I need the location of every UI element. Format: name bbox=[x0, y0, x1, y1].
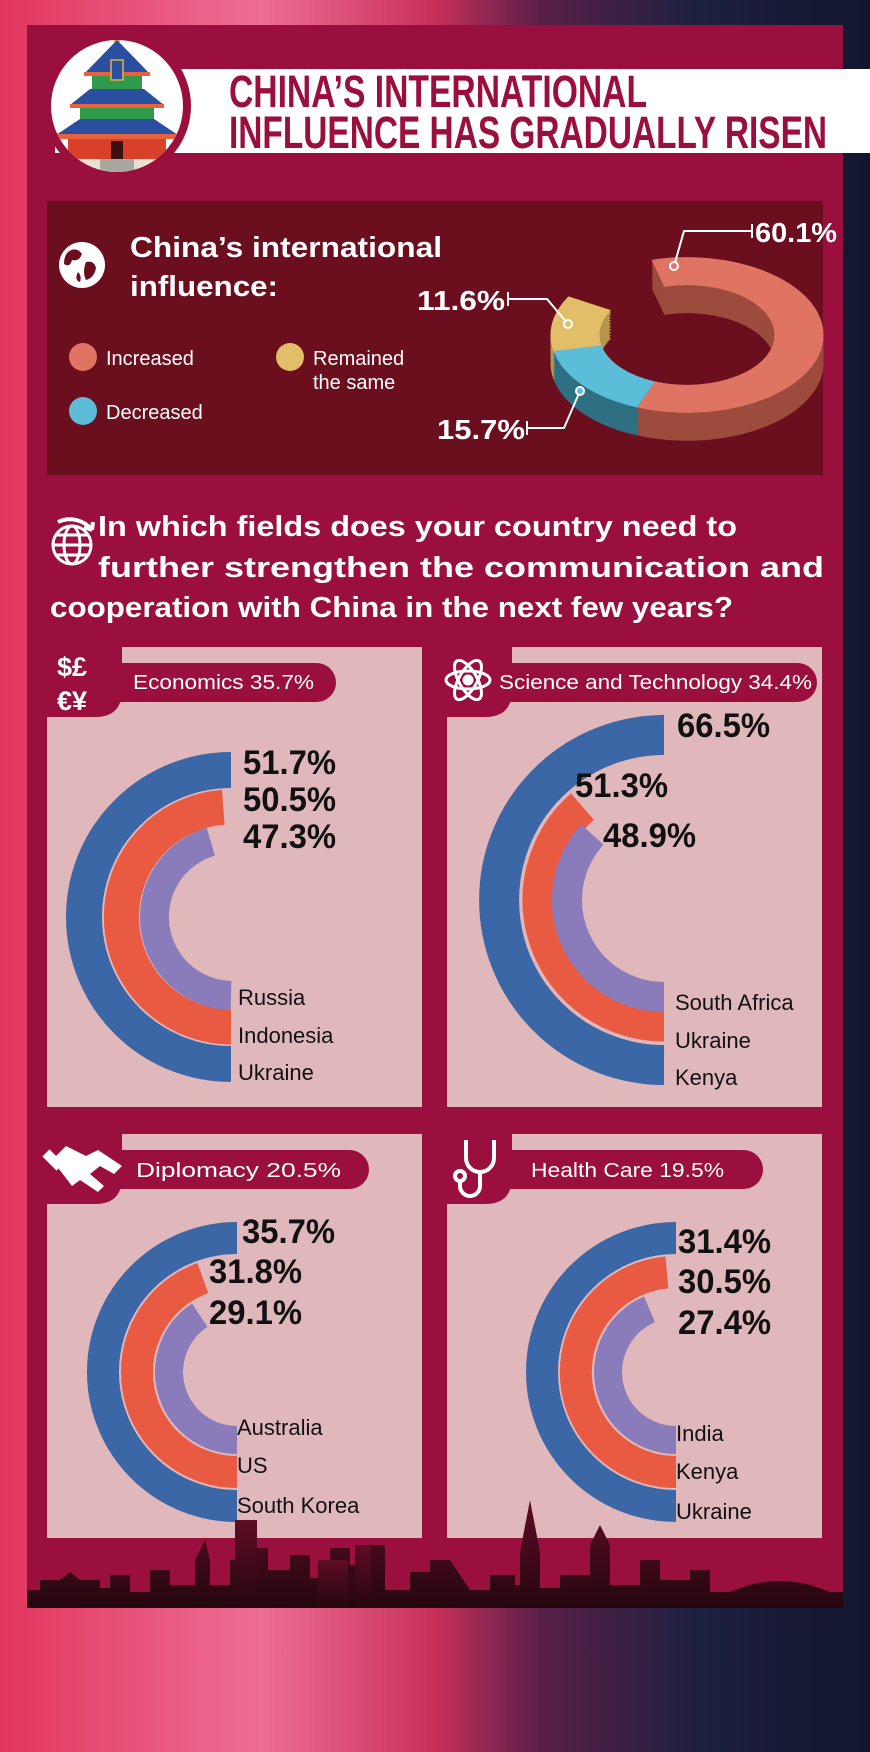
panel: economics: Economics 35.7% bbox=[133, 672, 314, 694]
icon: handshake bbox=[42, 1146, 122, 1192]
icon: stethoscope bbox=[455, 1140, 494, 1196]
panel: diplomacy: Australia bbox=[237, 1415, 323, 1440]
icon: currency bbox=[57, 652, 87, 716]
donut chart bbox=[417, 217, 837, 445]
icon: temple of heaven bbox=[51, 40, 191, 172]
panel: science and technology: Kenya bbox=[675, 1065, 738, 1090]
arc chart: health bbox=[542, 1238, 676, 1506]
legend: Increased bbox=[106, 348, 194, 370]
panel: science and technology: South Africa bbox=[675, 990, 794, 1015]
panel: health care: Ukraine bbox=[676, 1499, 752, 1524]
panel: health care: 27.4% bbox=[678, 1304, 771, 1342]
icon: globe bbox=[59, 242, 105, 288]
heading: influence: China’s international bbox=[130, 232, 442, 264]
panel: science and technology: 51.3% bbox=[575, 767, 668, 805]
donut chart: 60.1% bbox=[755, 217, 837, 248]
question heading: In which fields does your country need to bbox=[98, 511, 737, 543]
panel: health care: 30.5% bbox=[678, 1263, 771, 1301]
panel: health care: Health Care 19.5% bbox=[531, 1160, 724, 1182]
arc chart: economics bbox=[84, 770, 231, 1064]
panel: science and technology bbox=[446, 647, 822, 1107]
title bbox=[229, 66, 827, 158]
panel: health care bbox=[447, 1134, 822, 1538]
panel: economics: 50.5% bbox=[243, 781, 336, 819]
panel: science and technology: Ukraine bbox=[675, 1028, 751, 1053]
donut chart: 11.6% bbox=[417, 285, 505, 316]
icon: currency: $£ bbox=[57, 652, 87, 682]
title: CHINA’S INTERNATIONAL bbox=[229, 66, 647, 117]
title band bbox=[55, 66, 870, 158]
donut chart: 15.7% bbox=[437, 414, 525, 445]
heading: influence bbox=[130, 232, 442, 303]
icon: currency: €¥ bbox=[57, 686, 87, 716]
panel: economics: 51.7% bbox=[243, 744, 336, 782]
legend bbox=[69, 343, 404, 425]
arc chart: diplomacy bbox=[103, 1238, 237, 1506]
legend: the same bbox=[313, 372, 395, 394]
skyline silhouette bbox=[27, 1500, 843, 1608]
panel: diplomacy: US bbox=[237, 1453, 268, 1478]
legend: Remained bbox=[313, 348, 404, 370]
arc chart: science bbox=[499, 735, 664, 1065]
panel: diplomacy: 29.1% bbox=[209, 1294, 302, 1332]
panel: diplomacy: 35.7% bbox=[242, 1213, 335, 1251]
question heading: cooperation with China in the next few years? bbox=[50, 592, 733, 624]
panel: science and technology: 48.9% bbox=[603, 817, 696, 855]
panel: health care: India bbox=[676, 1421, 724, 1446]
panel: diplomacy bbox=[42, 1134, 422, 1538]
panel: science and technology: 66.5% bbox=[677, 707, 770, 745]
legend: Decreased bbox=[106, 402, 203, 424]
icon: globe with arrow bbox=[53, 519, 93, 564]
panel: health care: Kenya bbox=[676, 1459, 739, 1484]
panel: diplomacy: South Korea bbox=[237, 1493, 360, 1518]
panel: science and technology: Science and Technology 34.4% bbox=[499, 672, 812, 694]
panel: economics: 47.3% bbox=[243, 818, 336, 856]
question heading bbox=[50, 511, 824, 624]
panel: international influence bbox=[47, 201, 837, 475]
panel: diplomacy: Diplomacy 20.5% bbox=[136, 1160, 341, 1182]
question heading: further strengthen the communication and bbox=[98, 552, 824, 584]
panel: economics: Russia bbox=[238, 985, 306, 1010]
heading: influence: influence: bbox=[130, 271, 278, 303]
panel: diplomacy: 31.8% bbox=[209, 1253, 302, 1291]
panel: economics: Ukraine bbox=[238, 1060, 314, 1085]
panel: economics bbox=[47, 647, 422, 1107]
panel: economics: Indonesia bbox=[238, 1023, 334, 1048]
icon: atom bbox=[446, 656, 490, 704]
panel: health care: 31.4% bbox=[678, 1223, 771, 1261]
